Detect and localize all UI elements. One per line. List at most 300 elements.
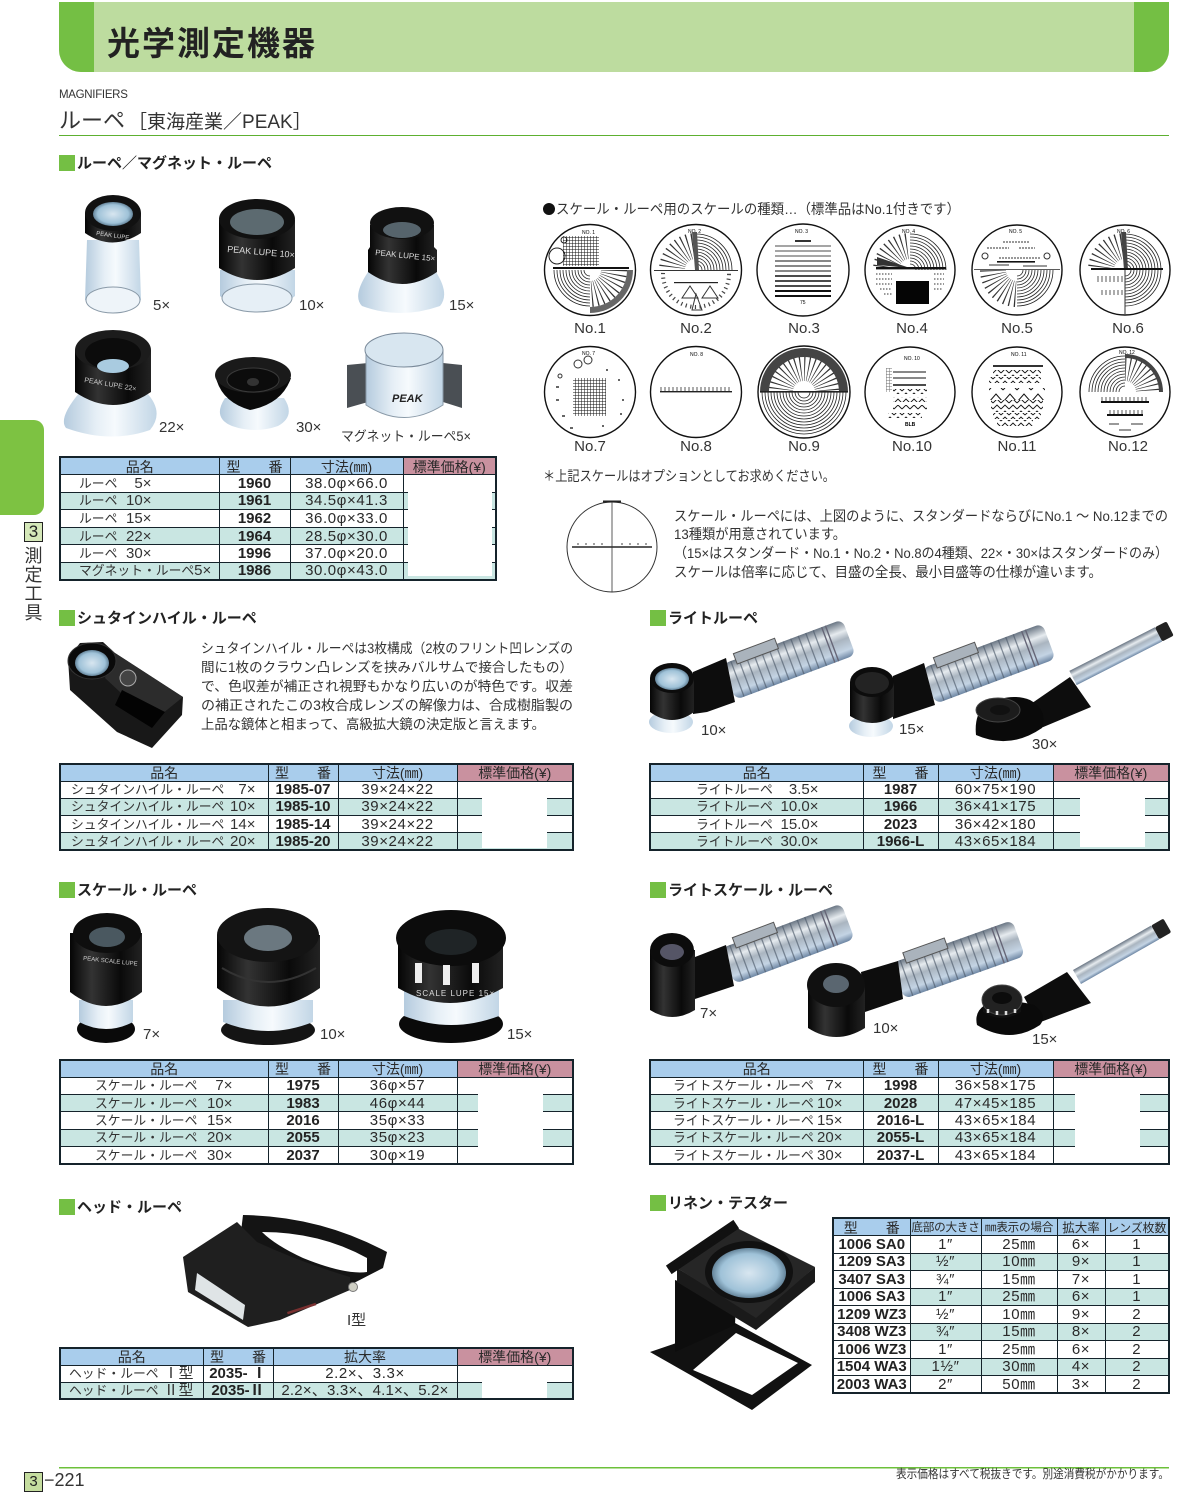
table header: 39×24×22 [361,781,434,798]
table header: 60×75×190 [955,781,1036,798]
table header [834,1219,1168,1392]
scale label no.11: No.11 [998,438,1036,455]
chapter name: 測定工具 [24,546,42,623]
table header: スケール・ルーペ [95,1130,197,1145]
section heading: light scale magnifier: ライトスケール・ルーペ [668,882,833,899]
price mask [1080,793,1145,847]
table header: 2 [1132,1323,1141,1340]
table header: 10× [817,1095,842,1112]
table: steinheil [59,763,574,851]
table header: 1006 SA3 [838,1288,905,1305]
table header: 1 [1132,1288,1141,1305]
scale no.10 [865,347,955,437]
scale no.1 [544,224,636,316]
table header: 43×65×184 [955,833,1036,850]
label scale 10x: 10× [320,1026,345,1043]
table header: 寸法(㎜) [372,765,423,781]
table header: 2035- Ⅰ [209,1365,267,1382]
section heading: scale magnifier: スケール・ルーペ [77,882,197,899]
table header: 15× [817,1112,842,1129]
table header: 1964 [238,528,271,545]
table header: 1″ [938,1236,953,1253]
footer rule [59,1467,1169,1468]
light magnifier 30x pen [976,621,1174,741]
table header: 25㎜ [1002,1236,1036,1253]
scale label no.7: No.7 [574,438,606,455]
table header: ライトスケール・ルーペ [673,1078,814,1093]
table header: 50㎜ [1002,1376,1036,1392]
linen tester [650,1222,815,1410]
price mask [482,1369,547,1398]
table header: 35φ×23 [370,1129,425,1146]
scale no.4: NO. 4 [902,229,915,235]
table header: 2023 [884,816,917,833]
table header: ライトスケール・ルーペ [673,1096,814,1111]
table header: スケール・ルーペ [95,1113,197,1128]
table: linen tester [832,1217,1170,1394]
table header: 寸法(㎜) [970,1061,1021,1077]
table header: 36.0φ×33.0 [305,510,388,527]
scale no.1: NO. 1 [582,230,595,236]
title banner [59,2,1169,72]
table header: 2035-Ⅱ [211,1382,265,1399]
table header: ½″ [936,1253,955,1270]
steinheil magnifier [68,642,183,748]
table header: 2.2×、3.3×、4.1×、5.2× [281,1382,449,1399]
scale explanation text: スケールは倍率に応じて、目盛の全長、最小目盛等の仕様が違います。 [674,564,1102,580]
table header: 1006 SA0 [838,1236,905,1253]
label light scale 15x: 15× [1032,1031,1057,1048]
table header: 30.0× [781,833,818,850]
table header: 2016-L [877,1112,924,1129]
table header: 品名 [118,1349,146,1365]
scale label no.9: No.9 [788,438,820,455]
label light scale 10x: 10× [873,1020,898,1037]
category heading: ルーペ［東海産業／PEAK］ [59,108,312,133]
table header: 5× [134,475,152,492]
table header: 9× [1072,1253,1090,1270]
table header: 43×65×184 [955,1129,1036,1146]
table header: 35φ×33 [370,1112,425,1129]
table header [651,1061,1168,1164]
steinheil description: 上品な鏡体と相まって、高級拡大鏡の決定版と言えます。 [201,716,545,732]
table header: 39×24×22 [361,816,434,833]
table header: 3407 SA3 [838,1271,905,1288]
table header: 標準価格(¥) [413,459,486,475]
scale magnifier 7x [70,913,142,1043]
table: scale magnifier [59,1059,574,1165]
scale label no.1: No.1 [574,320,606,337]
label 10x: 10× [299,297,324,314]
label 22x: 22× [159,419,184,436]
table header: ライトルーペ [696,834,773,849]
scale label no.6: No.6 [1112,320,1144,337]
table header: 標準価格(¥) [1074,765,1147,781]
table header: Ⅰ型 [163,1365,194,1382]
table header: 型 番 [226,459,282,475]
price mask [482,793,547,848]
table header: 拡大率 [1062,1220,1100,1234]
table header: ルーペ [79,529,117,544]
label light 30x: 30× [1032,736,1057,753]
table header: 1006 WZ3 [837,1341,906,1358]
table header: 1209 SA3 [838,1253,905,1270]
table header: 2.2×、3.3× [325,1365,405,1382]
table header: 型 番 [844,1220,900,1236]
table header: 10× [207,1095,232,1112]
table header: 2016 [286,1112,320,1129]
table header: 標準価格(¥) [478,1349,551,1365]
table header: 37.0φ×20.0 [305,545,388,562]
magnifier 30x [215,357,291,430]
table header: ½″ [936,1306,955,1323]
table header: ㎜表示の場合 [985,1220,1053,1234]
table header: 1209 WZ3 [837,1306,906,1323]
scale magnifier 15x: SCALE LUPE 15× [416,989,495,998]
page number: −221 [44,1470,85,1490]
table header: ルーペ [79,511,117,526]
section heading: light magnifier: ライトルーペ [668,610,758,627]
table header: 9× [1072,1306,1090,1323]
table header: 2 [1132,1376,1141,1392]
table header: 標準価格(¥) [1074,1061,1147,1077]
table header: 1985-10 [275,798,331,815]
page title: 光学測定機器 [107,25,317,62]
magnifier 10x: PEAK LUPE 10× [227,244,295,260]
table header: ¾″ [936,1323,955,1340]
table header: ¾″ [936,1271,955,1288]
section heading: steinheil: シュタインハイル・ルーペ [77,610,257,627]
table header: 6× [1072,1236,1090,1253]
table header: 1 [1132,1236,1141,1253]
table header: 36×42×180 [955,816,1036,833]
scale label no.8: No.8 [680,438,712,455]
table header: 2003 WA3 [837,1376,907,1392]
table header: 品名 [743,1061,771,1077]
scale no.2: NO. 2 [688,229,701,235]
scale no.8 [650,346,742,438]
label light scale 7x: 7× [700,1005,717,1022]
table header: 1985-20 [275,833,331,850]
scale no.4 [865,225,955,315]
magnifier 10x [219,199,295,312]
label scale 7x: 7× [143,1026,160,1043]
table header: 30.0φ×43.0 [305,562,388,579]
chapter number box: 3 [29,522,38,541]
table header: 15.0× [781,816,818,833]
table header: ルーペ [79,493,117,508]
banner right accent [1134,2,1169,72]
table header [61,458,495,579]
page number box: 3 [29,1473,38,1490]
table header: 30× [126,545,152,562]
table header: 1986 [238,562,271,579]
table header: 1998 [884,1077,917,1094]
price mask [1075,1090,1140,1162]
light magnifier 15x [849,618,1056,737]
table header: ライトスケール・ルーペ [673,1148,814,1163]
scale types heading: スケール・ルーペ用のスケールの種類…（標準品はNo.1付きです） [556,201,960,217]
table header: ライトルーペ [696,799,773,814]
table header: 寸法(㎜) [372,1061,423,1077]
table header: 15㎜ [1002,1323,1036,1340]
scale explanation text: 13種類が用意されています。 [674,526,846,542]
table header: 品名 [150,765,178,781]
magnifier 22x: PEAK LUPE 22× [84,377,137,393]
table header: 25㎜ [1002,1341,1036,1358]
table header: 1985-14 [275,816,331,833]
table header: 1 [1132,1253,1141,1270]
table header: 品名 [743,765,771,781]
table header [61,1061,572,1164]
table header: 5× [194,562,211,579]
table header: 28.5φ×30.0 [305,528,388,545]
table header: 2055 [286,1129,320,1146]
table header: 型 番 [872,1061,928,1077]
table header: 3× [1072,1376,1090,1392]
table header: 型 番 [275,765,331,781]
table header: 2055-L [877,1129,924,1146]
label 15x: 15× [449,297,474,314]
table header: 2 [1132,1341,1141,1358]
footer note: 表示価格はすべて税抜きです。別途消費税がかかります。 [896,1466,1169,1481]
table header: 15㎜ [1002,1271,1036,1288]
table: head magnifier [59,1347,574,1400]
table header [61,1349,572,1399]
scale no.5 [972,225,1062,315]
table header: 1975 [286,1077,320,1094]
table header: ライトルーペ [696,782,773,797]
table header: 標準価格(¥) [478,765,551,781]
table header: 30φ×19 [370,1147,425,1164]
label light 15x: 15× [899,721,924,738]
scale label no.3: No.3 [788,320,820,337]
table header: レンズ枚数 [1107,1220,1166,1234]
table header: 1″ [938,1288,953,1305]
table header: 8× [1072,1323,1090,1340]
table header: 43×65×184 [955,1147,1036,1164]
table header: 6× [1072,1288,1090,1305]
section heading: linen tester: リネン・テスター [668,1195,788,1212]
magnifier 5x: PEAK LUPE [96,231,130,242]
scale no.10: NO. 10 [904,356,920,362]
table header: 底部の大きさ [911,1220,980,1234]
steinheil description: の補正されたこの3枚合成レンズの解像力は、合成樹脂製の [201,698,573,713]
table header: 標準価格(¥) [478,1061,551,1077]
table header: 2 [1132,1358,1141,1375]
table: magnifiers [59,456,497,581]
magnetic magnifier [347,333,462,418]
table header: 2037-L [877,1147,924,1164]
section heading: head magnifier: ヘッド・ルーペ [77,1199,182,1216]
table header: 15× [126,510,152,527]
table header: 2028 [884,1095,917,1112]
table header: 1 [1132,1271,1141,1288]
table header: 拡大率 [344,1349,386,1365]
scale magnifier 7x: PEAK SCALE LUPE [83,956,138,968]
table header: スケール・ルーペ [95,1078,197,1093]
label 5x: 5× [153,297,170,314]
scale no.11 [972,347,1062,437]
table header: 品名 [126,459,154,475]
scale magnifier 10x [217,908,320,1045]
table header: 30㎜ [1002,1358,1036,1375]
magnifier 15x: PEAK LUPE 15× [375,248,436,263]
table header: ヘッド・ルーペ [69,1366,159,1381]
table header: 1966 [884,798,917,815]
table header: 10㎜ [1002,1253,1036,1270]
table header: 1960 [238,475,271,492]
head magnifier [183,1215,387,1327]
label 30x: 30× [296,419,321,436]
table header: 7× [238,781,256,798]
scale no.6: NO. 6 [1117,229,1130,235]
table: light magnifier [649,763,1170,851]
table header: シュタインハイル・ルーペ [71,799,224,814]
table header: 10.0× [781,798,818,815]
table header: 7× [1072,1271,1090,1288]
table header: 39×24×22 [361,798,434,815]
table header: 3.5× [789,781,818,798]
steinheil description: 間に1枚のクラウン凸レンズを挟みバルサムで接合したもの） [201,660,573,675]
table header: 20× [230,833,256,850]
table header: 47×45×185 [955,1095,1036,1112]
table header: 14× [230,816,256,833]
heading rule [59,135,1169,136]
table header: ライトルーペ [696,817,773,832]
table header: マグネット・ルーペ [79,563,194,578]
table header: 6× [1072,1341,1090,1358]
table header: 10㎜ [1002,1306,1036,1323]
table: light scale magnifier [649,1059,1170,1165]
side tab [0,420,44,515]
table header: 39×24×22 [361,833,434,850]
light scale magnifier 7x [650,898,855,1017]
table header: 22× [126,528,152,545]
table header: 38.0φ×66.0 [305,475,388,492]
label light 10x: 10× [701,722,726,739]
table header: ルーペ [79,546,117,561]
scale no.7 [544,346,636,438]
magnifier 5x [85,195,141,313]
magnifier 15x [358,207,444,313]
table header: 1962 [238,510,271,527]
light scale magnifier 15x pen [976,919,1171,1035]
magnetic magnifier: PEAK [392,393,424,405]
table header: 30× [207,1147,232,1164]
table header: 30× [817,1147,842,1164]
table header: 36×41×175 [955,798,1036,815]
label magnetic magnifier: マグネット・ルーペ5× [341,429,471,444]
table header: 10× [126,492,152,509]
table header: 46φ×44 [370,1095,425,1112]
scale no.7: NO. 7 [582,351,595,357]
table header: 1966-L [877,833,924,850]
scale explanation text: スケール・ルーペには、上図のように、スタンダードならびにNo.1 ～ No.12までの [674,508,1168,524]
steinheil description: シュタインハイル・ルーペは3枚構成（2枚のフリント凹レンズの [201,641,573,656]
steinheil description [201,641,573,732]
table header: 1996 [238,545,271,562]
table header: 36×58×175 [955,1077,1036,1094]
scale label no.4: No.4 [896,320,928,337]
scale explanation text: （15×はスタンダード・No.1・No.2・No.8の4種類、22×・30×はスタンダードのみ） [674,545,1168,561]
magnifier 22x [64,330,157,437]
table header: シュタインハイル・ルーペ [71,834,224,849]
table header: シュタインハイル・ルーペ [71,817,224,832]
steinheil description: で、色収差が補正され視野もかなり広いのが特色です。収差 [201,679,573,694]
table header: 型 番 [872,765,928,781]
table header: 20× [207,1129,232,1146]
table header: 2″ [938,1376,953,1392]
table header: 寸法(㎜) [970,765,1021,781]
standard scale [567,500,657,592]
table header: 1½″ [932,1358,959,1375]
scale magnifier 15x [396,910,506,1043]
table header: 1983 [286,1095,320,1112]
scale no.2 [650,224,742,316]
scale label no.2: No.2 [680,320,712,337]
english category label: MAGNIFIERS [59,89,128,101]
table header: 10× [230,798,256,815]
scale explanation text [674,508,1168,580]
table header: 1″ [938,1341,953,1358]
table header: 36φ×57 [370,1077,425,1094]
light scale magnifier 10x [807,915,1025,1037]
option note: ＊上記スケールはオプションとしてお求めください。 [543,468,835,484]
label scale 15x: 15× [507,1026,532,1043]
table header: 20× [817,1129,842,1146]
table header: Ⅱ型 [163,1382,194,1399]
scale label no.5: No.5 [1001,320,1033,337]
table header: 7× [215,1077,232,1094]
scale no.6 [1080,225,1170,315]
table header: 15× [207,1112,232,1129]
table header: シュタインハイル・ルーペ [71,782,224,797]
table header: スケール・ルーペ [95,1096,197,1111]
table header: 寸法(㎜) [321,459,372,475]
table header: 1987 [884,781,917,798]
table header: 4× [1072,1358,1090,1375]
chapter number box [24,522,43,542]
table header: 34.5φ×41.3 [305,492,388,509]
table header: ヘッド・ルーペ [69,1383,159,1398]
scale no.9 [758,346,850,438]
table header: ライトスケール・ルーペ [673,1113,814,1128]
section heading: magnifiers: ルーペ／マグネット・ルーペ [77,155,272,172]
table header: 3408 WZ3 [837,1323,906,1340]
page number box [24,1472,43,1492]
table header: 型 番 [210,1349,266,1365]
banner left accent [59,2,94,72]
table header: ライトスケール・ルーペ [673,1130,814,1145]
table header: 1985-07 [275,781,331,798]
label type I: I型 [347,1312,366,1329]
table header: スケール・ルーペ [95,1148,197,1163]
table header: 品名 [150,1061,178,1077]
scale no.5: NO. 5 [1009,229,1022,235]
table header: 型 番 [275,1061,331,1077]
price mask [408,475,492,576]
table header: ルーペ [79,476,117,491]
scale no.3: NO. 3 [795,229,808,235]
table header: 43×65×184 [955,1112,1036,1129]
table header: 25㎜ [1002,1288,1036,1305]
scale no.3 [757,224,849,316]
scale label no.12: No.12 [1108,438,1148,455]
table header: 7× [825,1077,842,1094]
price mask [478,1090,543,1162]
scale no.10: BLB [905,422,916,428]
